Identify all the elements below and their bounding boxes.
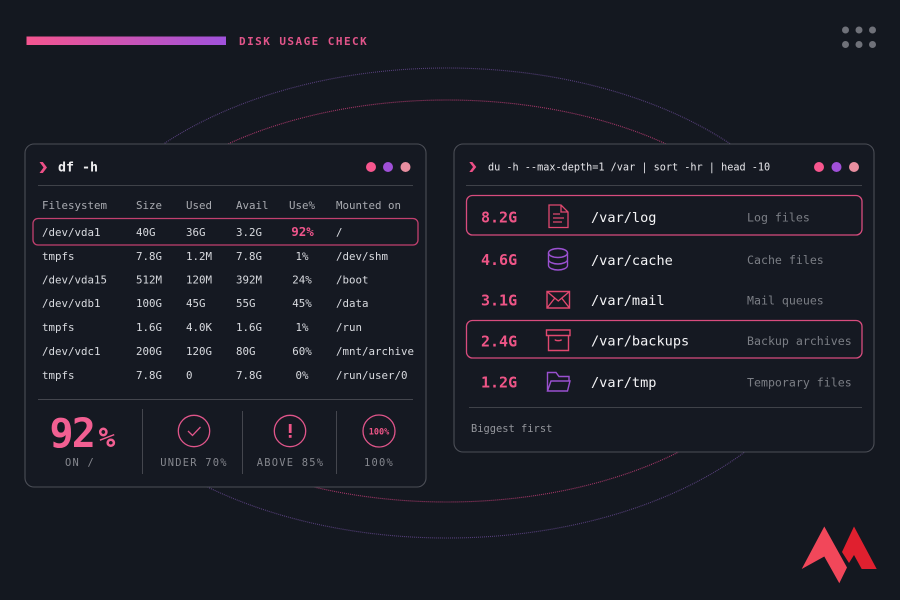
stat: under 70 percent: UNDER 70% xyxy=(160,457,228,469)
background dotted orbits xyxy=(62,68,832,538)
footer note: Biggest first xyxy=(471,423,552,435)
highlighted row: / xyxy=(336,226,343,239)
highlighted row: /dev/vda1 xyxy=(42,226,101,239)
stat: 92 percent on root: % xyxy=(98,421,116,454)
row: /var/cache: 4.6G xyxy=(481,251,517,269)
table row: /mnt/archive xyxy=(336,345,414,358)
icon: database xyxy=(548,248,568,270)
table row: 45% xyxy=(292,297,312,310)
table row: 55G xyxy=(236,297,256,310)
icon: prompt chevron xyxy=(40,162,47,173)
stat: 100 percent: 100% xyxy=(369,428,390,438)
table row: 4.0K xyxy=(186,321,213,334)
command title: df -h xyxy=(58,160,98,176)
stat: 100 percent xyxy=(363,415,395,469)
table row: 24% xyxy=(292,274,312,286)
table row xyxy=(42,321,362,334)
stat: 92 percent on root xyxy=(50,411,116,469)
table row xyxy=(42,250,388,263)
row: /var/mail: 3.1G xyxy=(481,292,517,310)
stat: 92 percent on root: ON / xyxy=(65,457,95,469)
table row: tmpfs xyxy=(42,250,75,263)
panel: df -h xyxy=(25,144,426,487)
row: /var/mail: /var/mail xyxy=(591,293,665,309)
table header: Avail xyxy=(236,199,269,212)
table row xyxy=(42,369,408,382)
table row: /dev/vdc1 xyxy=(42,345,101,358)
table row: 7.8G xyxy=(136,250,162,263)
row: /var/backups xyxy=(466,320,862,358)
row: /var/cache xyxy=(481,248,824,270)
table row: 0% xyxy=(295,369,309,382)
table row: 120M xyxy=(186,274,213,286)
table row xyxy=(42,345,414,358)
icon: prompt chevron xyxy=(469,162,476,172)
decorative dot grid icon xyxy=(842,26,876,48)
table row: 7.8G xyxy=(236,369,262,382)
table row: 7.8G xyxy=(236,250,262,263)
row: /var/log: Log files xyxy=(747,210,810,224)
table header: Size xyxy=(136,199,162,212)
table header: Mounted on xyxy=(336,199,401,212)
stat: above 85 percent: ABOVE 85% xyxy=(257,457,324,469)
stat: 92 percent on root: 92 xyxy=(50,411,94,457)
table row: 512M xyxy=(136,274,163,286)
table row: 1.6G xyxy=(236,321,262,334)
icon: document xyxy=(549,205,568,228)
row: /var/tmp: 1.2G xyxy=(481,374,517,392)
heading label: DISK USAGE CHECK xyxy=(239,35,368,48)
table row: 1% xyxy=(295,250,309,263)
table row: 200G xyxy=(136,345,162,358)
row: /var/tmp: Temporary files xyxy=(747,376,852,390)
table row: 7.8G xyxy=(136,369,162,382)
header accent bar xyxy=(26,36,226,45)
stat: 100 percent: 100% xyxy=(364,457,394,469)
table row: 1% xyxy=(295,321,309,334)
row: /var/tmp xyxy=(481,372,852,392)
table row: tmpfs xyxy=(42,321,75,334)
table row xyxy=(42,297,369,310)
command title: du -h --max-depth=1 /var | sort -hr | head -10 xyxy=(488,162,770,174)
table row: 120G xyxy=(186,345,212,358)
table row: tmpfs xyxy=(42,369,75,382)
table row: /boot xyxy=(336,274,369,286)
row: /var/tmp: /var/tmp xyxy=(591,375,656,391)
table row xyxy=(42,274,369,286)
highlighted row: 40G xyxy=(136,226,156,239)
table header: Used xyxy=(186,199,212,212)
table row: /dev/vdb1 xyxy=(42,297,101,310)
panel: du -h xyxy=(454,144,874,452)
highlighted row xyxy=(33,218,418,245)
table row: /dev/vda15 xyxy=(42,274,107,286)
highlighted row: 92% xyxy=(291,224,314,239)
table row: /data xyxy=(336,297,369,310)
table row: 60% xyxy=(292,345,312,358)
highlighted row: 3.2G xyxy=(236,226,262,239)
table row: /run xyxy=(336,321,362,334)
table row: 80G xyxy=(236,345,256,358)
table header: Use% xyxy=(289,199,315,212)
table header: Filesystem xyxy=(42,199,107,212)
row: /var/mail xyxy=(481,292,824,310)
row: /var/mail: Mail queues xyxy=(747,294,824,308)
row: /var/backups: 2.4G xyxy=(481,332,517,350)
row: /var/cache: Cache files xyxy=(747,253,824,267)
row: /var/backups: Backup archives xyxy=(747,334,852,348)
stat: under 70 percent xyxy=(160,415,228,469)
row: /var/log xyxy=(466,196,862,235)
table header xyxy=(42,199,401,212)
table row: 392M xyxy=(236,274,263,286)
icon: envelope xyxy=(547,292,570,308)
row: /var/cache: /var/cache xyxy=(591,253,673,269)
table row: /run/user/0 xyxy=(336,369,408,382)
row: /var/backups: /var/backups xyxy=(591,334,689,350)
stat: above 85 percent xyxy=(257,415,324,469)
row: /var/log: /var/log xyxy=(591,210,656,226)
table row: 0 xyxy=(186,369,193,382)
table row: 1.2M xyxy=(186,250,213,263)
window dots xyxy=(366,162,410,172)
table row: /dev/shm xyxy=(336,250,388,263)
icon: archive box xyxy=(546,330,570,350)
table row: 100G xyxy=(136,297,162,310)
row: /var/log: 8.2G xyxy=(481,208,517,226)
window dots xyxy=(814,162,859,172)
logo xyxy=(802,526,877,583)
table row: 1.6G xyxy=(136,321,162,334)
table row: 45G xyxy=(186,297,206,310)
icon: folder xyxy=(548,372,570,391)
highlighted row: 36G xyxy=(186,226,206,239)
